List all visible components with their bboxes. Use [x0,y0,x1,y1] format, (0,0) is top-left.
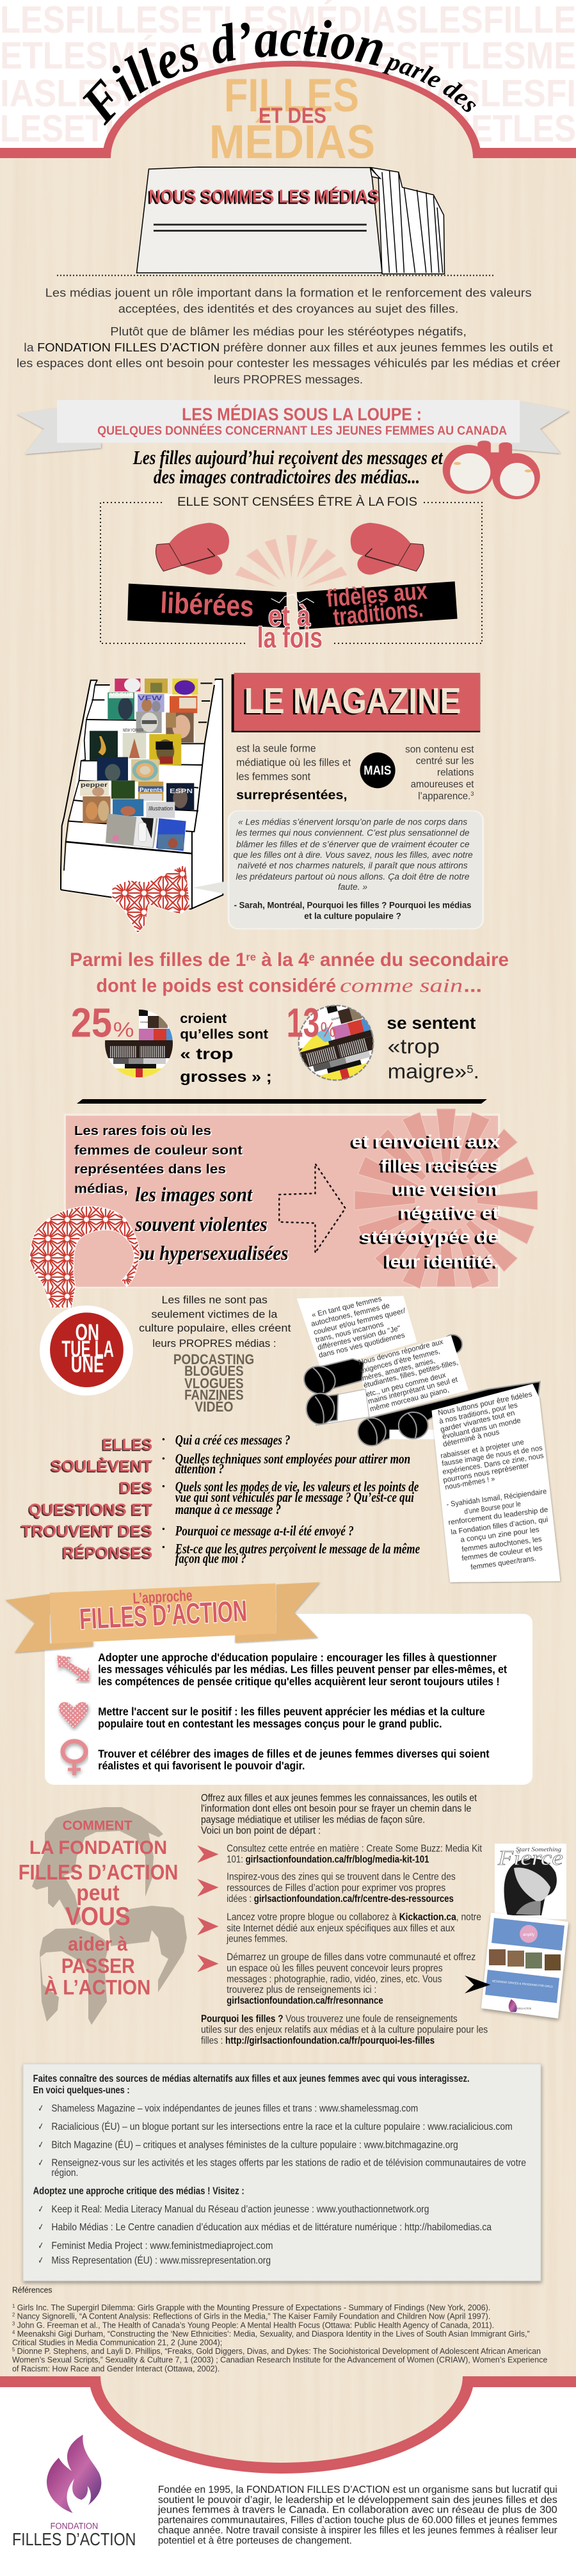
stat: 25% trop grosses: croient [180,1011,227,1026]
text: leurs propres médias: culture populaire, elles créent [139,1322,291,1334]
references: 5 [12,2347,15,2353]
panel: alternative media sources: ✓ [38,2222,44,2233]
magazine rack with magazines [61,678,223,909]
panel: alternative media sources: région. [51,2167,78,2178]
text: TUE LA [61,1336,114,1362]
references: Critical Studies in Media Communication 21, 2 (June 2004); [12,2337,222,2347]
title on arc: parle des [382,58,476,112]
heading: elles soulèvent des questions: QUESTIONS ET [29,1501,152,1518]
references: of Racism: How Race and Gender Interact (Ottawa, 2002). [12,2363,220,2373]
heading: parmi les filles: Parmi les filles de 1 [70,950,349,970]
step: groupe de filles: trouverez plus de renseignements ici : [227,1984,376,1995]
torn black ribbon: libérées / fidèles aux traditions [127,577,458,631]
scroll 2: quote: mains interprétant un seul et [367,1376,459,1406]
scroll 3: quote: femmes autochtones, les [461,1536,543,1554]
text: images violentes: les images sont [135,1184,253,1206]
badge: mais [360,752,396,788]
panel: alternative media sources: Miss Representation (ÉU) : www.missrepresentation.org [51,2255,271,2266]
list: podcasting etc: FANZINES [184,1387,244,1403]
heading: parmi les filles: à la 4 [256,950,309,970]
logo: fondation filles d'action [12,2435,136,2549]
text: images violentes: femmes de couleur sont [74,1143,243,1157]
text: images violentes: souvent violentes [135,1214,268,1236]
text: FILLES D’ACTION [12,2530,136,2549]
panel: alternative media sources: ✓ [38,2204,44,2215]
panel: alternative media sources: Adoptez une approche critique des médias ! Visitez : [33,2186,244,2196]
heading: elles soulèvent des questions: RÉPONSES [63,1543,152,1562]
heading: elles soulèvent des questions [21,1435,152,1562]
text: leurs propres médias: seulement victimes de la [151,1308,278,1320]
scroll 3: quote: fausse image de nous et de nos [442,1444,543,1468]
step: kickaction [197,1912,481,1944]
cover: designing spaces toolkit: DESIGNING SPACES & PROGRAMS FOR GIRLS [492,1979,553,1988]
stat: 25% trop grosses [72,1008,270,1085]
scroll 3: quote: Nous luttons pour être fidèles [437,1390,533,1417]
stat: 13% trop maigre: 5 [467,1063,474,1076]
list: critical questions: Qui a créé ces messages ? [175,1432,290,1448]
stat: 13% trop maigre: 13 [287,1000,319,1046]
heading: elles soulèvent des questions: SOULÈVENT [51,1457,152,1475]
stat: 13% trop maigre: «trop [388,1035,440,1058]
script heading: messages contradictoires [132,447,444,488]
logo: fondation filles d'action: FONDATION [51,2522,98,2531]
text: leurs propres médias: leurs PROPRES médias : [152,1337,276,1349]
scroll 3: quote: d’une Bourse pour le [464,1501,522,1516]
speech bubble: quote from Sarah: faute. » [338,882,367,892]
references: 2 [12,2312,15,2318]
scroll 3: quote: déterminé à nous [442,1428,500,1449]
speech bubble: quote from Sarah: et la culture populaire ? [304,912,401,921]
text: son contenu: 3 [470,790,474,797]
heading: comment la fondation: LA FONDATION [29,1837,167,1858]
scroll 3: quote: - Syahidah Ismail, Récipiendaire [446,1488,547,1509]
text: version négative: leur identité. [385,1252,499,1271]
text: version négative: et renvoient aux [352,1131,500,1151]
callout: et à la fois [257,600,323,654]
references: 1 [12,2304,15,2309]
text: images violentes [74,1123,289,1264]
badge: mais: MAIS [364,763,391,778]
heading: comment la fondation: aider à [68,1933,127,1955]
callout: et à la fois: et à [268,600,310,632]
references [12,2285,547,2373]
cover: designing spaces toolkit [481,1913,568,2018]
panel: alternative media sources: ✓ [38,2103,44,2114]
text: version négative: filles racisées [381,1155,500,1175]
list: podcasting etc: PODCASTING [173,1351,254,1367]
intro paragraphs [17,275,561,386]
list: podcasting etc: VIDÉO [195,1399,233,1415]
step: groupe de filles: girlsactionfoundation.ca/fr/resonnance [227,1995,383,2006]
speech bubble: quote from Sarah [193,811,483,929]
heading: le magazine [232,673,480,732]
scroll 2: quote: étudiantes, filles, petites-filles, [363,1358,459,1390]
text: surreprésentées: les femmes sont [236,770,310,782]
panel: alternative media sources: ✓ [38,2240,44,2251]
heading: parmi les filles: e [309,951,315,963]
step: groupe de filles [197,1952,476,2006]
magazine rack with magazines: VFW [138,695,163,702]
burst between gloves [235,535,347,587]
subtitle: filles et des médias [209,70,375,168]
frame: elle sont censées être à la fois [100,495,482,643]
icon: double arrow [57,1655,89,1681]
arrow: black chevron pointing to toolkit [465,1976,490,1993]
text: surreprésentées [236,742,351,802]
step: kickaction: Lancez votre propre blogue ou collaborez à Kickaction.ca, notre [227,1912,481,1922]
scroll 3: quote: rabaisser et à projeter une [440,1438,525,1460]
stat: 25% trop grosses: qu’elles sont [180,1027,268,1042]
stat: 13% trop maigre: se sentent [387,1015,476,1033]
scroll 2: quote: mères, amantes, amies, [362,1357,436,1383]
text: about the foundation [157,2484,557,2546]
list: podcasting etc [173,1351,254,1415]
panel: women of colour representation [65,1109,538,1289]
heading: elles soulèvent des questions: DES [120,1479,152,1497]
heading: elles soulèvent des questions: ELLES [102,1435,152,1454]
scroll 3: quote: garder vivantes tout en [440,1409,516,1434]
text: trouver et célébrer [98,1748,490,1772]
panel: alternative media sources: En voici quelques-unes : [33,2085,130,2096]
step: kickaction: jeunes femmes. [227,1933,287,1944]
badge: on tue la une: ON [76,1319,99,1345]
references: 4 [12,2330,15,2335]
icon: patterned headscarf [29,1206,140,1308]
text: son contenu: centré sur les [416,755,474,766]
heading: comment la fondation: À L’ACTION [44,1976,150,1999]
text: images violentes: Les rares fois où les [74,1123,211,1138]
magazine rack with magazines: pepper [81,782,108,788]
banner: l'approche filles d'action: L’approche [132,1587,193,1607]
heading: parmi les filles: dont le poids est considéré [96,976,336,996]
text: pourquoi les filles [201,2013,488,2046]
scroll 2: quote: même morceau au piano, [369,1387,450,1413]
cover: start something fierce zine: Start Something [516,1846,562,1853]
text: surreprésentées: surreprésentées, [236,788,347,802]
text: son contenu: l’apparence. [418,790,510,801]
heading: comment la fondation: VOUS [65,1903,131,1931]
banner: l'approche filles d'action: FILLES D’ACTION [79,1594,248,1636]
text: offrez aux filles [201,1792,477,1836]
icon: heart [59,1702,88,1728]
intro paragraphs: acceptées, des identités et des croyances au sujet des filles. [118,302,458,315]
scroll 1: quote: différentes version du "Je" [317,1324,401,1352]
subtitle: filles et des médias: MÉDIAS [209,115,375,168]
list: critical questions [163,1432,420,1566]
text: leurs propres médias [139,1294,291,1415]
magazine rack with magazines: Parents [140,787,163,793]
references: Références [12,2285,52,2295]
list: critical questions: façon que moi ? [175,1550,246,1566]
black divider bar [77,1099,487,1104]
test-card circle 2 [298,1005,374,1081]
stat: 25% trop grosses: 25 [71,1000,112,1046]
heading: elles soulèvent des questions: TROUVENT DES [21,1522,152,1540]
text: son contenu: son contenu est [405,743,474,755]
text: trouver et célébrer: réalistes et qui favorisent le pouvoir d'agir. [98,1759,305,1772]
torn black ribbon: libérées / fidèles aux traditions: libérées [160,586,255,623]
torn black ribbon: libérées / fidèles aux traditions: traditions. [332,595,424,631]
text: offrez aux filles: Voici un bon point de départ : [201,1824,321,1836]
stat: 13% trop maigre: % [321,1018,336,1042]
references: 3 [12,2321,15,2326]
magazine rack with magazines: NEW YORKER [123,729,143,733]
text: leurs propres médias: Les filles ne sont pas [162,1294,268,1306]
text: surreprésentées: médiatique où les filles et [236,757,351,768]
title on arc: Filles d’action [83,20,383,125]
scroll 1: quote [297,1295,417,1365]
text: version négative: stéréotypée de [361,1227,499,1246]
heading: parmi les filles: re [246,951,256,963]
text: version négative: négative et [400,1203,499,1222]
graphic: grey raised arms [32,1807,187,2025]
heading: comment la fondation: COMMENT [63,1818,132,1833]
cover: start something fierce zine [495,1844,566,1919]
panel: alternative media sources: ✓ [38,2255,44,2266]
stat: 13% trop maigre: . [474,1059,479,1083]
scroll 1: quote: autochtones, femmes de [310,1302,390,1328]
stat: 25% trop grosses: grosses » ; [180,1068,272,1085]
scroll 1: quote: « En tant que femmes [311,1295,383,1319]
scroll 3: quote: renforcement du leadership de [448,1506,548,1527]
scroll 1: quote: couleur et/ou femmes queer/ [313,1307,406,1337]
text: version négative: une version [394,1179,499,1198]
scroll 1: quote: dans nos vies quotidiennes [318,1332,406,1360]
text: son contenu [405,743,474,801]
scroll 2: quote: Nous devons répondre aux [358,1338,444,1367]
icon: patterned megaphone [112,864,190,933]
panel: alternative media sources [23,2064,541,2281]
cover: designing spaces toolkit: amplify [523,1933,534,1937]
scroll 2: quote: etc., un peu comme deux [365,1371,447,1399]
frame: elle sont censées être à la fois: ELLE SONT CENSÉES ÊTRE À LA FOIS [177,495,417,509]
text: about the foundation: potentiel et à être porteuses de changement. [158,2534,352,2546]
test-card circle 1 [104,1008,174,1078]
badge: on tue la une [40,1305,133,1396]
heading: comment la fondation: PASSER [61,1954,135,1977]
magazine rack with magazines: ESPN [170,788,193,795]
stat: 13% trop maigre: maigre» [388,1059,509,1083]
scroll 3: quote [358,1381,560,1582]
text: son contenu: relations [437,766,474,778]
icon: left boxing glove [156,523,229,575]
badge: on tue la une: UNE [71,1351,104,1377]
cover: designing spaces toolkit: GIRLS ACTION [517,2007,531,2010]
newspaper illustration [137,167,445,274]
text: mettre l'accent [98,1705,485,1730]
text: surreprésentées: est la seule forme [236,742,316,754]
step: zines [197,1871,456,1904]
list: critical questions: Pourquoi ce message a-t-il été envoyé ? [175,1522,354,1538]
magazine rack with magazines: Illustration [148,805,173,812]
panel: white approach card [45,1614,532,1785]
text: images violentes: représentées dans les [74,1161,226,1177]
panel: alternative media sources: ✓ [38,2157,44,2168]
scroll 3: quote: expériences. Dans ce zine, nous [442,1452,545,1476]
text: images violentes: ou hypersexualisées [135,1242,289,1264]
sunburst rays [355,1109,538,1289]
text: version négative [352,1131,500,1271]
arrow: dotted [279,1164,346,1253]
text: adopter une approche [98,1651,507,1688]
heading: parmi les filles: ... [463,976,482,996]
scroll 3: quote: femmes queer/trans. [470,1555,536,1572]
scroll 3: quote: à nos traditions, pour les [438,1401,518,1426]
subtitle: filles et des médias: FILLES [224,70,359,122]
step: create some buzz [197,1842,482,1865]
scroll 2: quote [302,1335,468,1426]
cover: start something fierce zine: Fierce [497,1847,563,1870]
intro paragraphs: leurs PROPRES messages. [214,373,363,386]
panel: alternative media sources: ✓ [38,2121,44,2132]
newspaper headline: NOUS SOMMES LES MÉDIAS [148,186,380,207]
text: la fois [257,622,323,654]
icon: binoculars [443,440,540,499]
panel: alternative media sources: Feminist Media Project : www.feministmediaproject.com [51,2240,273,2251]
scroll 3: quote: a conçu un zine pour les [460,1526,540,1544]
icon: right boxing glove [351,523,424,575]
scroll 3: quote: femmes de couleur et les [461,1544,543,1563]
list: podcasting etc: BLOGUES [184,1363,244,1379]
list: podcasting etc: VLOGUES [184,1375,244,1391]
magazine rack with magazines: VOGUE [110,693,133,697]
panel: alternative media sources: ✓ [38,2139,44,2150]
stat: 25% trop grosses: « trop [180,1045,233,1062]
torn black ribbon: libérées / fidèles aux traditions: fidèles aux [325,577,428,613]
text: son contenu: amoureuses et [411,778,474,790]
scroll 2: quote: exigences d’être femmes, [360,1348,441,1375]
heading: comment la fondation: peut [76,1880,120,1905]
test-card circle 1: SIGNAL [140,1020,150,1024]
test-card circle 2: SIGNAL [331,1015,342,1021]
stat: 25% trop grosses: % [113,1018,134,1042]
banner: les médias sous la loupe [17,400,570,454]
heading: comment la fondation [19,1818,178,1999]
text: images violentes: médias, [74,1181,128,1196]
scroll 3: quote: la Fondation filles d’action, qui [451,1516,548,1536]
scroll 1: quote: trans, nous incarnons [315,1321,385,1344]
title on arc [83,20,476,125]
subtitle: filles et des médias: ET DES [259,104,326,128]
scroll 3: quote: nous-mêmes ! » [444,1475,495,1492]
list: critical questions: manque à ce message ? [175,1501,281,1517]
list: critical questions: attention ? [175,1461,224,1477]
scroll 3: quote: évoluant dans un monde [442,1417,522,1441]
intro paragraphs: Plutôt que de blâmer les médias pour les stéréotypes négatifs, [110,325,467,338]
heading: parmi les filles [70,950,509,996]
scroll 3: quote: pourrons nous représenter [442,1461,530,1485]
stat: 13% trop maigre [288,1005,477,1083]
heading: comment la fondation: FILLES D’ACTION [19,1860,178,1884]
icon: female symbol [63,1741,86,1775]
banner: l'approche filles d'action [6,1582,319,1653]
heading: parmi les filles: comme sain [340,974,463,996]
